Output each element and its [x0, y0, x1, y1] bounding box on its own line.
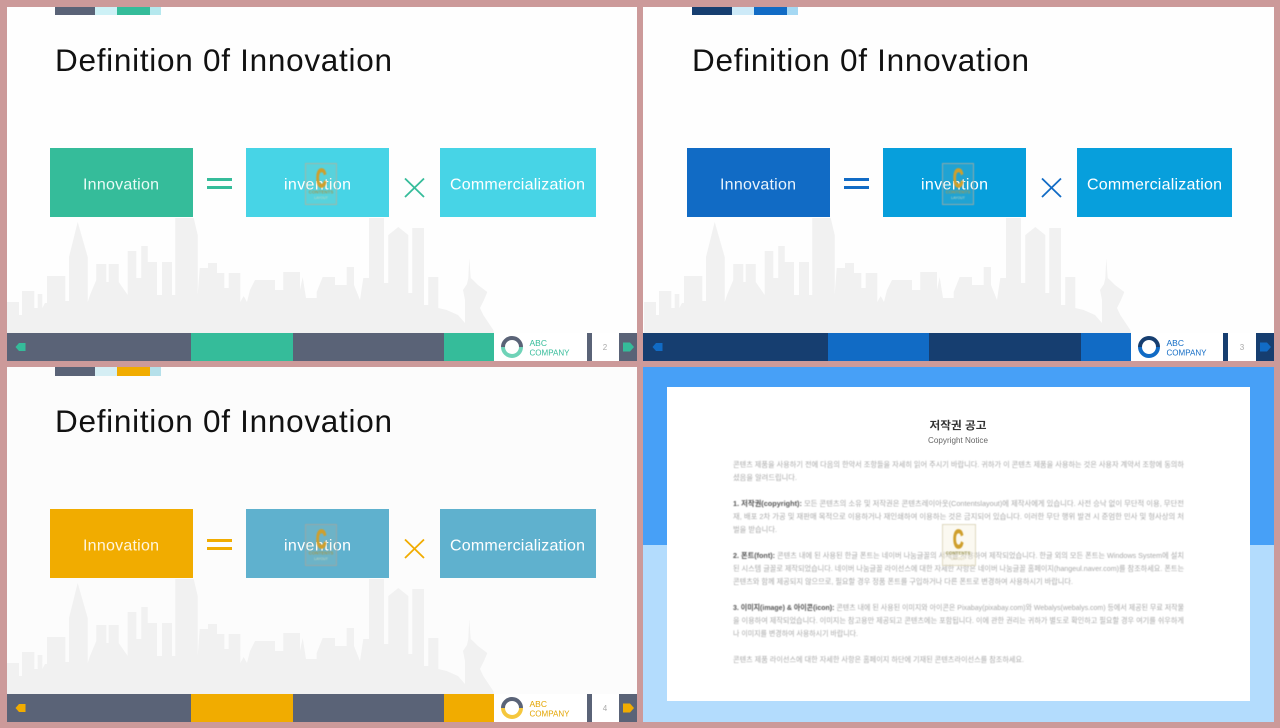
box: Commercialization: Commercialization: [450, 176, 585, 194]
section 2: font: [733, 550, 1184, 586]
icon: multiply sign: [405, 540, 424, 558]
logo text: COMPANY: [1166, 348, 1207, 358]
section 3: image and icon: 을 이용하여 제작되었습니다. 이미지는 참고용만 제공되고 콘텐츠에는 포함됩니다. 이에 관한 권리는 귀하가 별도로 확인하고 필요할 경우 여기를 쉬우하게: [733, 615, 1184, 625]
watermark badge: [942, 524, 976, 566]
watermark badge: LAYOUT: [314, 557, 329, 561]
skyline silhouette: [644, 218, 1131, 333]
footer bar: [7, 694, 637, 722]
section 1: copyright: 벌을 받습니다.: [733, 524, 777, 534]
box: invention: [246, 509, 389, 578]
panel: slide 3 blue: [643, 7, 1274, 361]
section 3: image and icon: 3. 이미지(image) & 아이콘(icon): 콘텐츠 내에 된 사용된 이미지와 아이콘은 Pixabay(pixabay.com)와 Webalys(webalys.com) 등에서 제공된 무료 저작물: [733, 602, 1184, 612]
box: invention: [883, 148, 1026, 217]
watermark badge: CONTENTS: [309, 190, 333, 194]
icon: logo ring: [1140, 338, 1158, 356]
intro paragraph: 셨음을 알려드립니다.: [733, 472, 797, 482]
icon: logo ring: [503, 338, 521, 356]
watermark badge: CONTENTS: [946, 190, 970, 194]
watermark badge: C: [953, 163, 964, 193]
section 2: font: 콘텐츠와 함께 제공되지 않으므로, 필요할 경우 정품 폰트를 구입하거나 다른 폰트로 변경하여 사용하시기 바랍니다.: [733, 576, 1073, 586]
panel: slide 2 green: [7, 7, 637, 361]
watermark badge: [306, 524, 336, 566]
icon: next arrow: [1260, 342, 1271, 352]
page number: 3: [1240, 343, 1245, 352]
intro paragraph: 콘텐츠 제품을 사용하기 전에 다음의 한약서 조항들을 자세히 읽어 주시기 바랍니다. 귀하가 이 콘텐츠 제품을 사용하는 것은 사용자 계약서 조항에 동의하: [733, 459, 1184, 469]
watermark badge: [306, 163, 336, 204]
section 2: font: 된 시스템 글꼴로 제작되었습니다. 네이버 나눔글꼴 라이선스에 대한 자세한 사항은 네이버 나눔글꼴 홈페이지(hangeul.naver.com)를 참조하세요. 폰트는: [733, 563, 1184, 573]
box: invention: invention: [284, 538, 351, 554]
title: Definition 0f Innovation: [692, 42, 1029, 78]
box: Innovation: [50, 509, 193, 578]
icon: equals sign: [207, 539, 232, 550]
icon: equals sign: [207, 178, 232, 189]
watermark badge: C: [316, 163, 327, 193]
box: invention: invention: [921, 176, 988, 194]
section 2: font: 2. 폰트(font): 콘텐츠 내에 된 사용된 한글 폰트는 네이버 나눔글꼴의 서체를 사용하여 제작되었습니다. 한글 외의 모든 폰트는 Windows System에 설치: [733, 550, 1184, 560]
box: invention: [246, 148, 389, 217]
box: invention: invention: [284, 176, 351, 194]
section 1: copyright: [733, 498, 1184, 534]
footer bar: [7, 333, 637, 361]
title: Definition 0f Innovation: [55, 42, 392, 78]
logo text: COMPANY: [530, 348, 570, 358]
icon: next arrow: [623, 342, 634, 352]
closing line: 콘텐츠 제품 라이선스에 대한 자세한 사항은 홈페이지 하단에 기재된 콘텐츠라이선스를 참조하세요.: [733, 654, 1024, 664]
section 1: copyright: 재, 배포 2차 가공 및 재판매 목적으로 이용하거나 재인쇄하여 이용하는 것은 금지되어 있습니다. 이러한 무단 행위 발견 시 준엄한 민사 및 형사상의 처: [733, 511, 1184, 521]
title: Definition 0f Innovation: [55, 403, 392, 439]
watermark badge: C: [316, 524, 327, 554]
box: Innovation: [50, 148, 193, 217]
section 3: image and icon: 나 이미지를 변경하여 사용하시기 바랍니다.: [733, 628, 858, 638]
skyline silhouette: [7, 579, 494, 694]
box: Commercialization: Commercialization: [1087, 176, 1222, 194]
top colour tabs: [55, 7, 161, 15]
watermark badge: LAYOUT: [951, 196, 966, 200]
watermark badge: CONTENTS: [309, 550, 333, 556]
panel: slide 4 amber: [7, 367, 637, 722]
box: Innovation: Innovation: [83, 538, 159, 554]
watermark badge: [942, 163, 974, 204]
box: Innovation: Innovation: [83, 176, 159, 194]
box: Innovation: [687, 148, 830, 217]
watermark badge: LAYOUT: [951, 557, 966, 561]
box: Commercialization: [440, 148, 596, 217]
logo text: ABC: [530, 338, 547, 348]
icon: logo ring: [503, 699, 521, 717]
top colour tabs: [55, 367, 161, 376]
intro paragraph: [733, 459, 1184, 482]
box: Commercialization: [440, 509, 596, 578]
watermark badge: C: [953, 524, 964, 554]
icon: next arrow: [623, 704, 634, 712]
box: Commercialization: Commercialization: [450, 538, 585, 554]
section 3: image and icon: [733, 602, 1184, 638]
logo text: ABC: [530, 699, 547, 709]
icon: previous arrow: [16, 343, 26, 351]
box: Innovation: Innovation: [720, 176, 796, 194]
skyline silhouette: [7, 218, 494, 333]
notice subheading: Copyright Notice: [928, 436, 989, 445]
icon: multiply sign: [1042, 178, 1061, 197]
notice heading: 저작권 공고: [930, 418, 986, 432]
top colour tabs: [692, 7, 798, 15]
icon: previous arrow: [16, 704, 26, 712]
icon: previous arrow: [652, 343, 662, 351]
watermark badge: LAYOUT: [314, 196, 329, 200]
logo text: [530, 699, 570, 718]
watermark badge: CONTENTS: [946, 550, 970, 556]
logo text: ABC: [1166, 338, 1184, 348]
icon: equals sign: [844, 178, 869, 189]
section 1: copyright: 1. 저작권(copyright): 모든 콘텐츠의 소유 및 저작권은 콘텐츠레이아웃(Contentslayout)에 제작사에게 있습니다. 사전 승낙 없이 무단적 이용, 무단전: [733, 498, 1184, 508]
page number: 2: [603, 343, 608, 352]
panel: copyright notice slide: [643, 367, 1274, 722]
logo text: [1166, 338, 1207, 358]
box: Commercialization: [1077, 148, 1232, 217]
logo text: [530, 338, 570, 358]
icon: multiply sign: [405, 178, 424, 197]
footer bar: [643, 333, 1274, 361]
logo text: COMPANY: [530, 708, 570, 718]
page number: 4: [603, 704, 608, 713]
